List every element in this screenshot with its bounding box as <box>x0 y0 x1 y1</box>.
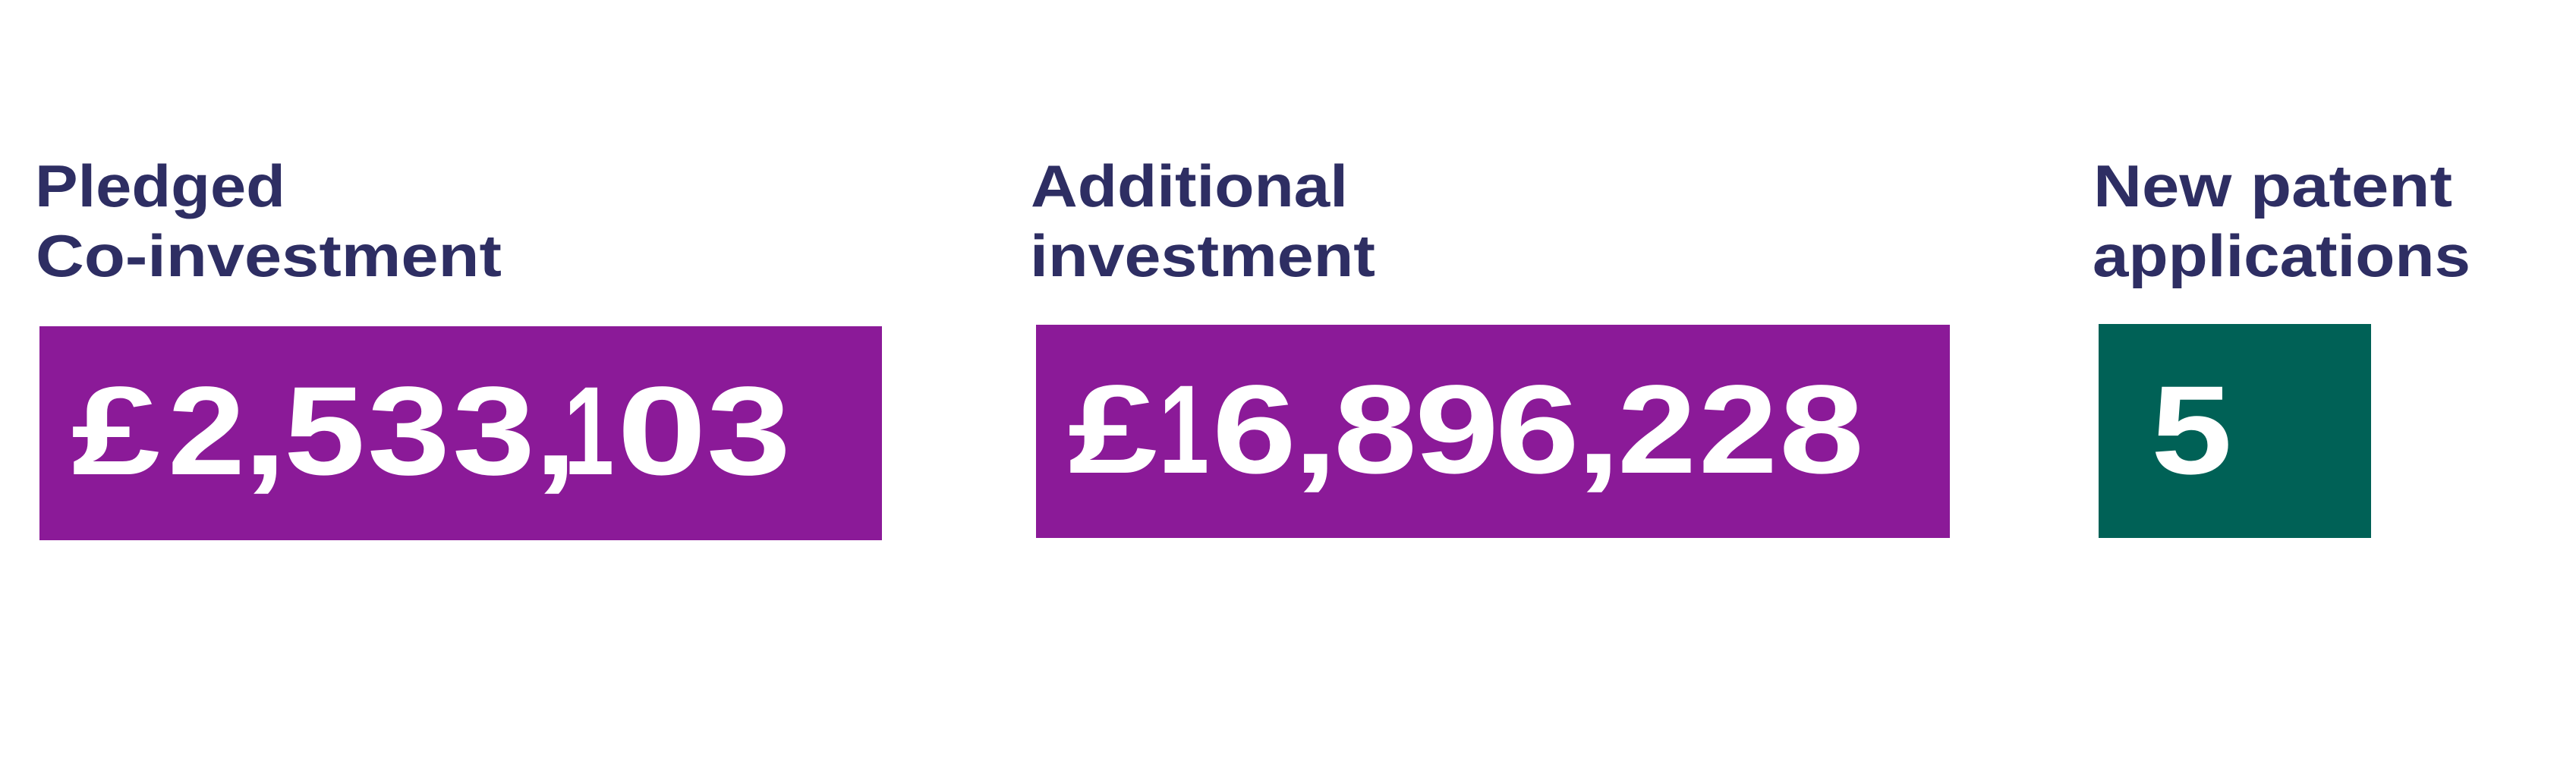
value box: £16,896,228: , <box>1576 360 1621 500</box>
value box: £16,896,228: 8 <box>1779 360 1864 500</box>
heading: new patent applications <box>2093 153 2471 289</box>
heading: new patent applications: applications <box>2093 222 2471 289</box>
value box: £2,533,103: 3 <box>452 361 535 502</box>
value box: £16,896,228: 2 <box>1617 360 1696 500</box>
heading: additional investment: investment <box>1030 222 1375 289</box>
value box: £16,896,228: 6 <box>1495 360 1579 500</box>
value box: £2,533,103: 3 <box>367 361 450 502</box>
value box: £2,533,103: 1 <box>564 361 614 502</box>
value box: £16,896,228: 9 <box>1415 360 1499 500</box>
value box: £2,533,103: , <box>243 361 287 502</box>
value box: £16,896,228 <box>1036 325 1950 538</box>
heading: pledged co-investment: Co-investment <box>36 222 502 289</box>
panel: pledged co-investment <box>35 153 882 540</box>
value box: 5: 5 <box>2151 360 2232 501</box>
heading: new patent applications: New patent <box>2093 153 2452 219</box>
heading: additional investment: Additional <box>1031 153 1348 219</box>
value box: £2,533,103 <box>39 326 882 540</box>
value box: £2,533,103: 5 <box>284 361 365 502</box>
panel: new patent applications <box>2093 153 2471 538</box>
value box: £2,533,103: , <box>534 361 578 502</box>
panel: additional investment <box>1030 153 1950 538</box>
value box: £16,896,228: 6 <box>1212 360 1296 500</box>
value box: £2,533,103: £ <box>71 361 160 502</box>
heading: additional investment <box>1030 153 1375 289</box>
value box: 5 <box>2099 324 2371 538</box>
value box: £2,533,103: 3 <box>707 361 791 502</box>
value box: £16,896,228: 2 <box>1699 360 1778 500</box>
value box: £2,533,103: 0 <box>617 361 707 502</box>
value box: £16,896,228: 8 <box>1334 360 1417 500</box>
heading: pledged co-investment: Pledged <box>35 153 285 219</box>
value box: £16,896,228: , <box>1293 360 1338 500</box>
heading: pledged co-investment <box>35 153 502 289</box>
value box: £16,896,228: 1 <box>1159 360 1209 500</box>
value box: £2,533,103: 2 <box>168 361 245 502</box>
value box: £16,896,228: £ <box>1068 360 1157 500</box>
